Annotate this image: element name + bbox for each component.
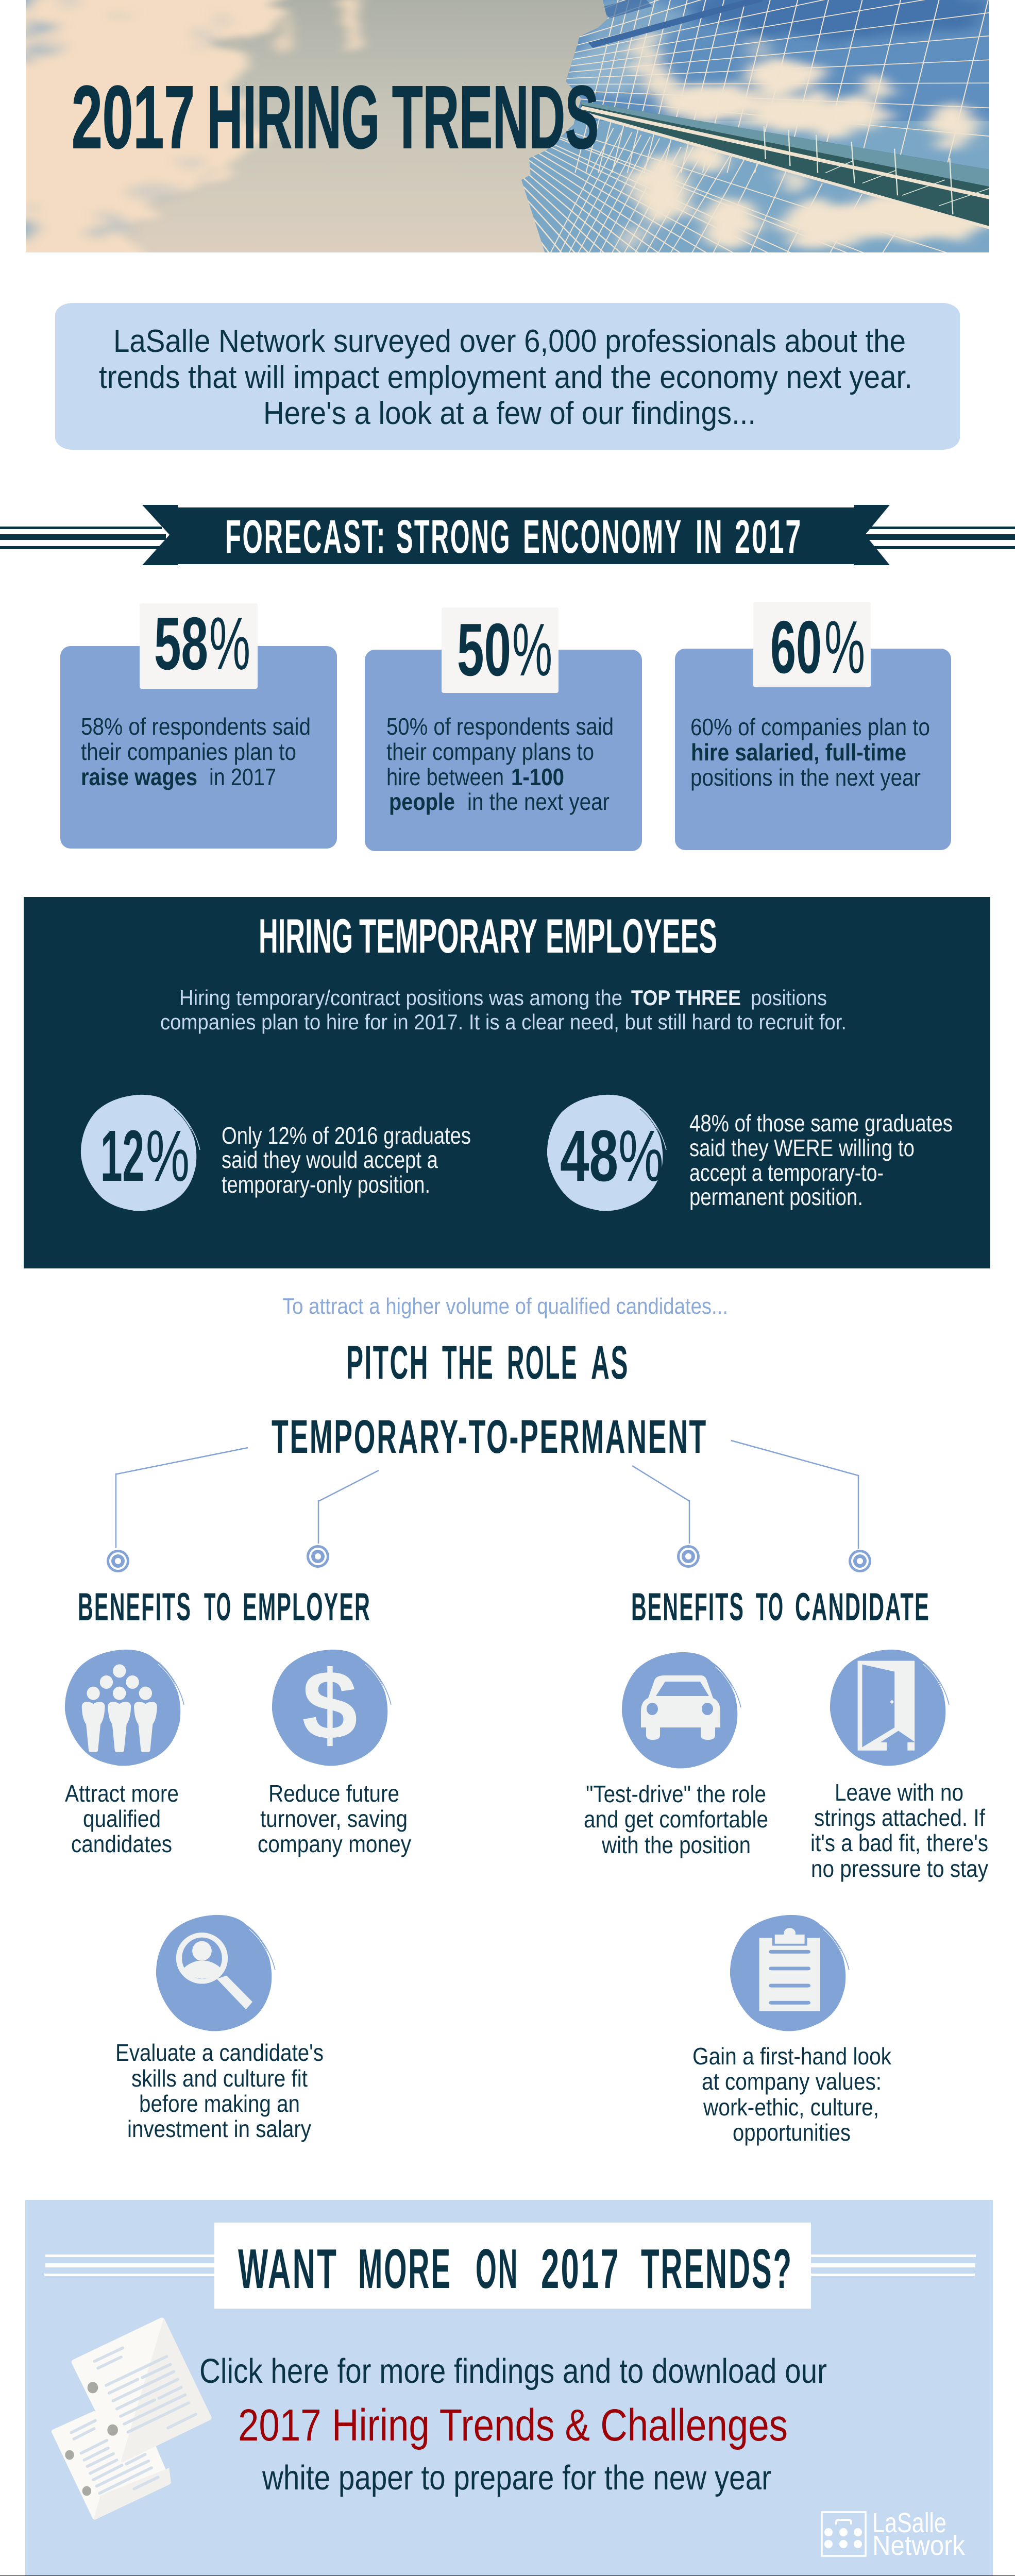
benefit: attract more candidates: qualified	[83, 1805, 161, 1832]
benefit: test-drive: "Test-drive" the role	[586, 1781, 766, 1807]
benefit: evaluate candidate: skills and culture fit	[131, 2065, 308, 2092]
benefit: attract more candidates: Attract more	[65, 1780, 179, 1807]
intro callout: LaSalle Network surveyed over 6,000 professionals about the	[113, 324, 906, 359]
benefit: reduce turnover: Reduce future	[268, 1780, 399, 1807]
benefit: leave with no strings: Leave with no	[835, 1779, 963, 1806]
heading: pitch the role: THE	[442, 1336, 494, 1389]
forecast ribbon heading: IN	[696, 511, 723, 563]
benefit: evaluate candidate: investment in salary	[127, 2115, 311, 2142]
stat card: 58%: in 2017	[209, 764, 276, 790]
panel intro text: companies plan to hire for in 2017. It is a clear need, but still hard to recruit for.	[160, 1010, 847, 1034]
panel heading: HIRING	[259, 909, 353, 963]
panel intro text: Hiring temporary/contract positions was among the	[179, 986, 622, 1010]
stat: 48%: 48% of those same graduates	[689, 1110, 953, 1137]
benefit: evaluate candidate: Evaluate a candidate's	[115, 2039, 324, 2066]
heading banner: MORE	[358, 2238, 452, 2300]
benefit: reduce turnover: company money	[258, 1831, 411, 1857]
benefit: company values	[692, 1915, 892, 2146]
stat card: 50%: hire between	[386, 764, 504, 790]
stat: 48%: accept a temporary-to-	[689, 1159, 884, 1186]
forecast ribbon heading	[0, 505, 1015, 565]
heading banner: TRENDS?	[641, 2238, 793, 2300]
heading: benefits to employer: EMPLOYER	[243, 1585, 371, 1629]
stat: 12%: %	[146, 1115, 190, 1196]
title: 2017	[72, 67, 195, 167]
panel intro text: positions	[751, 986, 827, 1010]
heading banner: WANT	[238, 2238, 338, 2300]
heading: benefits to candidate: BENEFITS	[631, 1585, 745, 1629]
icon: magnifying glass	[156, 1915, 275, 2031]
stat: 12%: Only 12% of 2016 graduates	[222, 1122, 471, 1149]
stat card: 58%: 58% of respondents said	[81, 713, 311, 740]
benefit: leave with no strings: no pressure to stay	[811, 1855, 988, 1882]
stat card: 50%: their company plans to	[386, 738, 594, 765]
benefit: leave with no strings: strings attached. If	[814, 1804, 985, 1831]
heading: benefits to employer: TO	[204, 1585, 232, 1629]
heading: benefits to candidate: TO	[756, 1585, 784, 1629]
stat: 12%: said they would accept a	[222, 1146, 438, 1173]
call to action text: Click here for more findings and to download our	[199, 2352, 827, 2391]
benefit: test-drive: and get comfortable	[584, 1806, 768, 1833]
panel intro text: TOP THREE	[631, 986, 741, 1010]
logo: LaSalle Network: LaSalle	[872, 2507, 946, 2538]
forecast ribbon heading: STRONG	[396, 511, 511, 563]
stat card: 60%: 60	[770, 605, 822, 689]
benefit: evaluate candidate: before making an	[139, 2090, 300, 2117]
call to action text	[199, 2352, 827, 2497]
icon: dollar sign	[272, 1650, 391, 1766]
stat card: 60%: 60% of companies plan to	[690, 714, 930, 740]
forecast ribbon heading: 2017	[735, 511, 802, 563]
call to action text: 2017 Hiring Trends & Challenges	[238, 2400, 788, 2450]
heading: pitch the role: AS	[591, 1336, 629, 1389]
stat: 48%: %	[618, 1115, 664, 1196]
intro callout: Here's a look at a few of our findings...	[263, 396, 756, 431]
stat card: 58%	[60, 602, 337, 849]
stat card: 50%: 50	[457, 608, 511, 691]
stat: 12%	[81, 1095, 471, 1211]
panel: want more on 2017 trends	[25, 2200, 993, 2575]
lead-in text: To attract a higher volume of qualified candidates...	[282, 1294, 728, 1319]
intro callout	[55, 303, 960, 450]
forecast ribbon heading: FORECAST:	[225, 511, 386, 563]
stat: 12%: 12	[100, 1115, 144, 1196]
icon: open door	[830, 1650, 949, 1766]
logo: LaSalle Network	[822, 2507, 966, 2561]
stat: 48%: said they WERE willing to	[689, 1134, 915, 1161]
benefit: leave with no strings	[810, 1650, 988, 1882]
title	[72, 67, 599, 167]
heading banner	[44, 2223, 976, 2309]
stat card: 60%: hire salaried, full-time	[691, 739, 906, 766]
benefit: company values: Gain a first-hand look	[692, 2043, 892, 2070]
panel intro text	[160, 986, 847, 1034]
benefit: test-drive	[584, 1652, 768, 1858]
icon: car	[622, 1652, 741, 1768]
stat card: 58%: 58	[154, 602, 208, 685]
call to action text: white paper to prepare for the new year	[262, 2459, 771, 2497]
benefit: attract more candidates: candidates	[71, 1831, 172, 1857]
heading: pitch the role: TEMPORARY-TO-PERMANENT	[272, 1411, 707, 1463]
stat card: 50%: people	[389, 788, 455, 815]
stat: 48%: 48	[560, 1115, 618, 1196]
connector: candidate 1	[632, 1466, 700, 1568]
benefit: evaluate candidate	[115, 1915, 324, 2142]
connector: candidate 2	[731, 1440, 871, 1572]
benefit: company values: at company values:	[702, 2068, 882, 2095]
header banner photo	[0, 0, 997, 917]
stat card: 60%: positions in the next year	[690, 764, 921, 791]
icon: clipboard	[730, 1915, 849, 2031]
title: HIRING	[207, 67, 380, 167]
panel heading: EMPLOYEES	[546, 909, 717, 963]
benefit: reduce turnover: turnover, saving	[260, 1805, 408, 1832]
stat card: 50%: 1-100	[511, 764, 564, 790]
connector: employer 2	[307, 1470, 379, 1568]
stat card: 60%	[675, 602, 951, 850]
forecast ribbon heading: ENCONOMY	[523, 511, 683, 563]
heading: pitch the role	[272, 1336, 707, 1463]
benefit: leave with no strings: it's a bad fit, there's	[810, 1829, 988, 1856]
stat: 48%: permanent position.	[689, 1183, 863, 1210]
heading banner: ON	[476, 2238, 519, 2300]
connector: employer 1	[107, 1448, 248, 1572]
title: TRENDS	[392, 67, 599, 167]
icon: dollar sign: $	[302, 1651, 358, 1760]
stat card: 50%: in the next year	[467, 788, 610, 815]
stat card: 60%: %	[824, 605, 865, 689]
benefit: company values: work-ethic, culture,	[703, 2094, 879, 2121]
intro callout: trends that will impact employment and the economy next year.	[99, 360, 912, 395]
benefit: reduce turnover	[258, 1650, 411, 1857]
benefit: test-drive: with the position	[601, 1832, 751, 1858]
heading banner: 2017	[541, 2238, 620, 2300]
stat card: 50%	[365, 607, 642, 851]
stat card: 50%: 50% of respondents said	[386, 713, 614, 740]
panel: hiring temporary employees	[24, 897, 990, 1268]
logo: LaSalle Network: Network	[872, 2530, 966, 2561]
heading: pitch the role: ROLE	[507, 1336, 578, 1389]
panel heading: TEMPORARY	[359, 909, 537, 963]
benefit: attract more candidates	[65, 1650, 184, 1857]
stat card: 58%: their companies plan to	[81, 738, 296, 765]
panel heading	[259, 909, 717, 963]
heading: pitch the role: PITCH	[346, 1336, 429, 1389]
benefit: company values: opportunities	[733, 2119, 851, 2146]
stat card: 58%: raise wages	[81, 764, 197, 790]
stat: 12%: temporary-only position.	[222, 1171, 430, 1198]
stat: 48%	[547, 1095, 953, 1211]
stat card: 50%: %	[512, 608, 552, 691]
heading: benefits to employer: BENEFITS	[78, 1585, 192, 1629]
stat card: 58%: %	[209, 602, 250, 685]
icon: group of people	[65, 1650, 184, 1766]
icon: white paper documents	[52, 2318, 211, 2519]
